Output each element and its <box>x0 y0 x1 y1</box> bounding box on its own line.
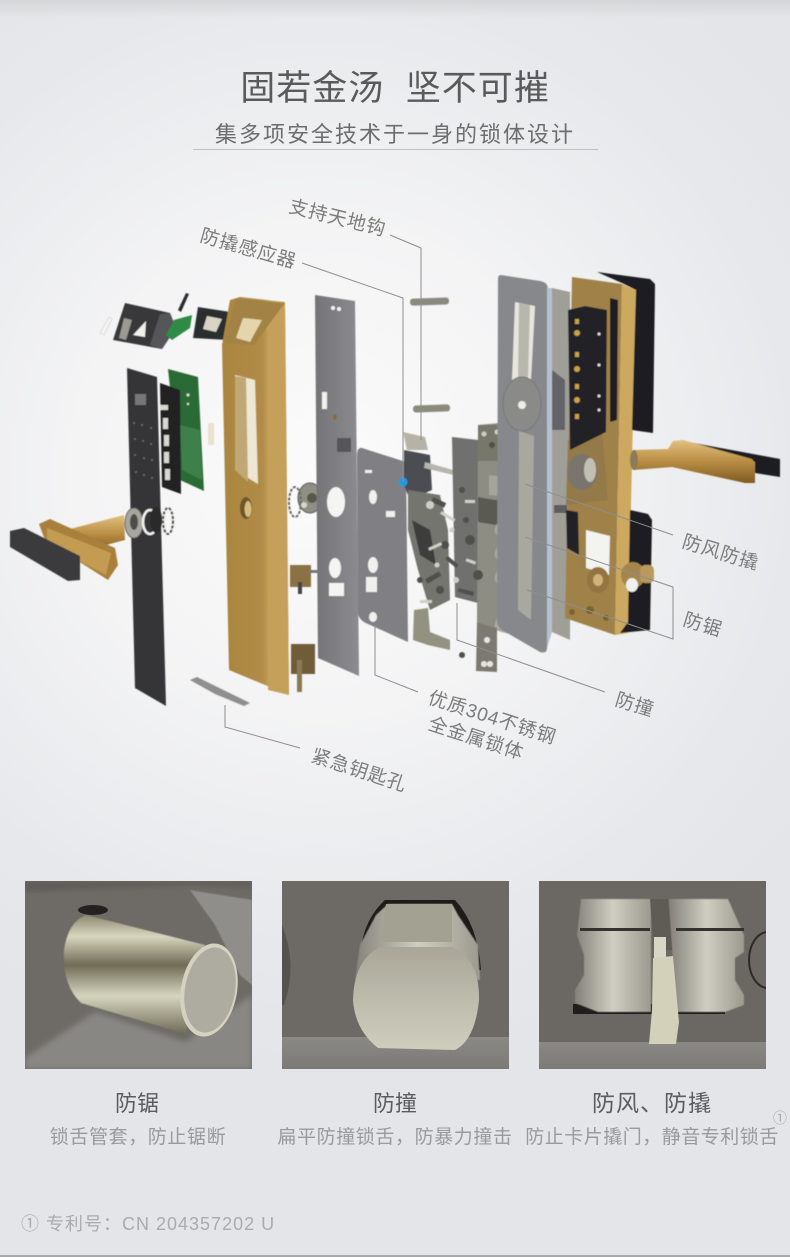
leader lines <box>225 235 673 748</box>
bottom edge <box>0 1255 790 1257</box>
label: anti-wind anti-pry: 防风防撬 <box>680 531 762 575</box>
subtitle: 集多项安全技术于一身的锁体设计 <box>215 122 575 147</box>
label: anti-saw: 防锯 <box>681 609 725 641</box>
photo: anti-saw bolt <box>25 881 252 1069</box>
divider under subtitle <box>193 149 598 150</box>
emergency key hole cover <box>190 677 250 706</box>
patent footnote: ① 专利号：CN 204357202 U <box>21 1214 275 1234</box>
fingerprint module <box>100 293 230 349</box>
cylinder and spindle hardware <box>289 483 322 692</box>
gold rear panel <box>565 277 636 635</box>
steel backing plate <box>315 295 359 676</box>
black covers <box>597 272 655 633</box>
label: emergency key hole: 紧急钥匙孔 <box>308 745 409 796</box>
keypad faceplate <box>127 368 166 706</box>
label: anti-ram: 防撞 <box>613 689 657 721</box>
lock mechanism internals <box>398 297 521 672</box>
gold front panel <box>222 297 289 695</box>
rear steel plates <box>497 275 570 652</box>
footnote marker: ① <box>773 1110 787 1126</box>
caption heading: 防风、防撬 <box>592 1090 712 1116</box>
caption: anti-saw <box>50 1091 226 1148</box>
title: 固若金汤 坚不可摧 <box>240 69 550 108</box>
caption description: 锁舌管套，防止锯断 <box>50 1126 226 1148</box>
label: all-metal body: 全金属锁体 <box>425 713 526 764</box>
lock body steel case plate <box>357 448 408 642</box>
callout labels <box>198 196 762 796</box>
caption heading: 防撞 <box>373 1091 417 1116</box>
label: sky-earth hook: 支持天地钩 <box>287 196 388 241</box>
caption: anti-wind anti-pry <box>525 1090 779 1148</box>
label: tamper sensor: 防撬感应器 <box>198 225 299 273</box>
front lever handle <box>10 507 173 581</box>
exploded lock diagram <box>10 272 780 706</box>
caption description: 扁平防撞锁舌，防暴力撞击 <box>277 1126 513 1148</box>
circuit board and key frame <box>160 369 214 494</box>
rear lever handle <box>630 440 780 483</box>
caption description: 防止卡片撬门，静音专利锁舌 <box>525 1126 779 1148</box>
caption: anti-ram <box>277 1091 513 1148</box>
photo: anti-ram bolt <box>282 881 509 1069</box>
photo: anti-pry latch <box>539 881 787 1069</box>
black rear circuit cover <box>566 306 607 555</box>
label: stainless lock body: 优质304不锈钢 <box>425 687 559 749</box>
caption heading: 防锯 <box>115 1091 159 1116</box>
